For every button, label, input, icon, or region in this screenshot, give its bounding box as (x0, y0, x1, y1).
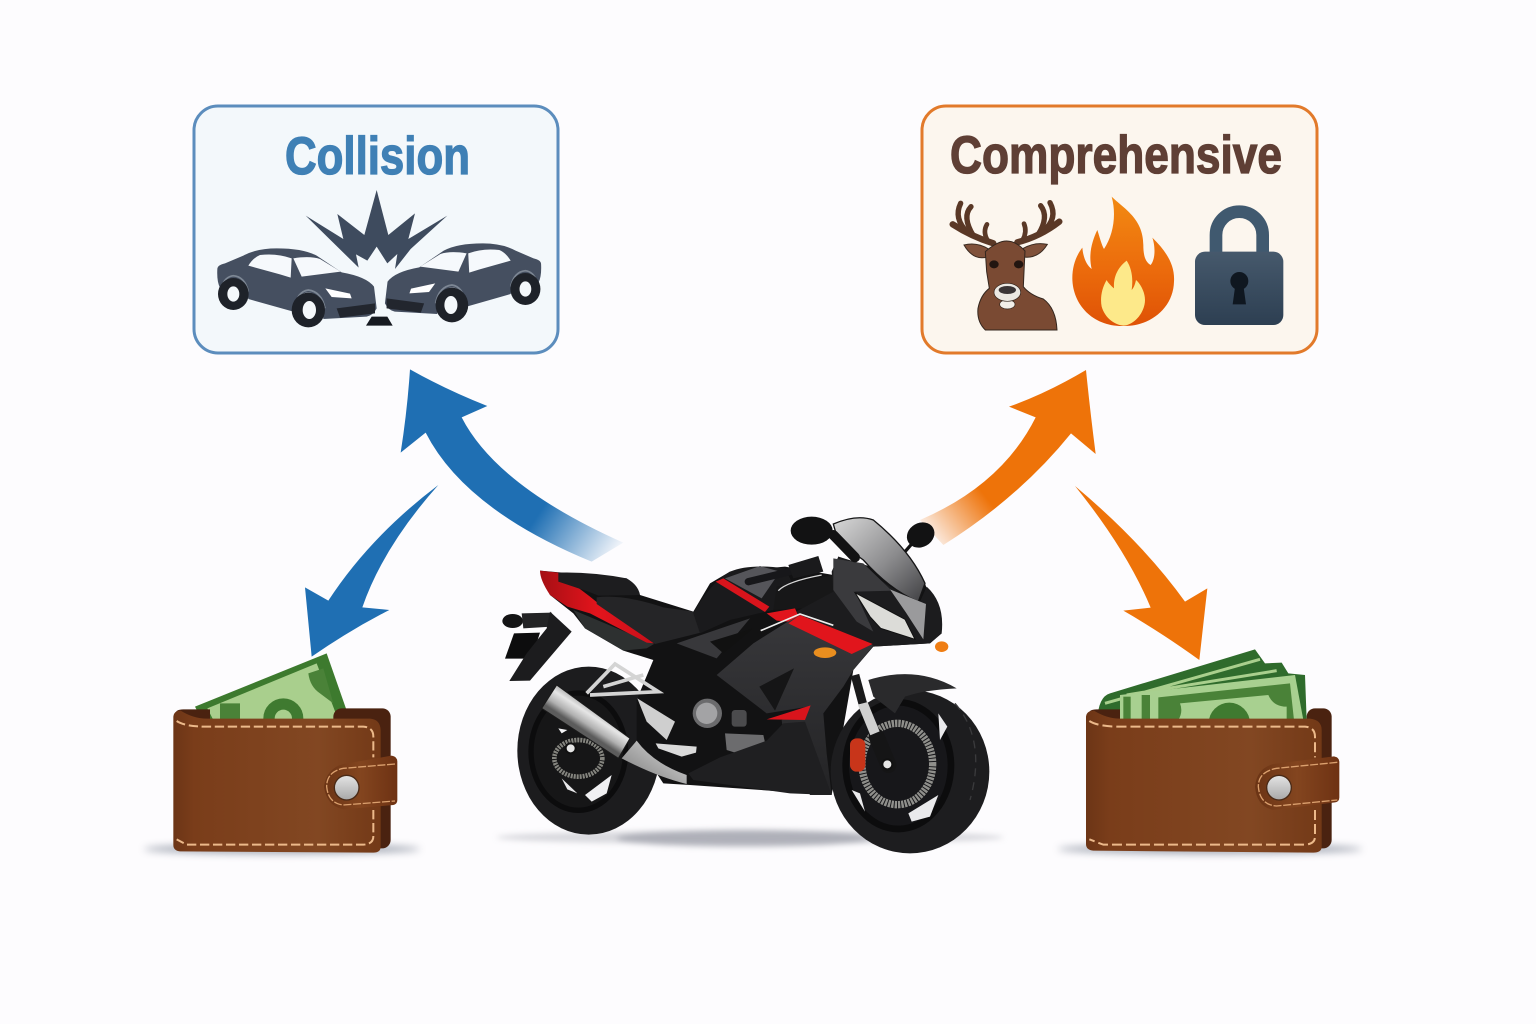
left car (217, 248, 377, 327)
pillion seat (558, 573, 640, 596)
clasp strap (324, 756, 397, 809)
arrow: blue collision to small wallet (305, 485, 438, 657)
front fender (868, 674, 957, 713)
arrow: orange comprehensive to large wallet (1075, 486, 1207, 660)
fuel tank (693, 566, 792, 633)
arrow: blue motorcycle to collision (401, 369, 623, 562)
tail section (540, 571, 654, 651)
icon: deer (953, 203, 1059, 330)
icon: fire (1072, 197, 1174, 326)
rear wheel (517, 667, 660, 835)
stitching (1089, 721, 1315, 845)
fairing vent (759, 668, 794, 711)
crash burst (306, 190, 447, 269)
wallet: small payout (144, 653, 420, 854)
stack of bills (1097, 649, 1307, 744)
turn signals (814, 641, 948, 658)
side fairing (717, 615, 873, 795)
single bill (195, 653, 350, 738)
subframe bracket (587, 664, 658, 695)
base silhouette (540, 557, 942, 795)
fork (877, 737, 888, 765)
snap button (334, 775, 359, 800)
icon: padlock (1195, 212, 1283, 325)
handlebar and controls (748, 556, 837, 610)
wallet shadow (144, 844, 420, 854)
ground shadow (497, 830, 1003, 847)
frame panel (677, 618, 750, 658)
right car (385, 243, 541, 322)
wallet front (1086, 711, 1322, 853)
wallet front (173, 711, 381, 853)
icons: deer, fire, lock (953, 197, 1283, 330)
comprehensive card frame (922, 106, 1317, 353)
nose fairing (790, 557, 942, 647)
wallet back (1307, 708, 1332, 848)
right mirror (902, 517, 939, 553)
panel: collision (194, 106, 558, 353)
front wheel (831, 675, 989, 853)
headlight cowl (855, 589, 926, 639)
wallet shadow (1058, 844, 1362, 854)
red fairing stripes (761, 608, 873, 720)
wallet back (333, 708, 391, 848)
motorcycle (497, 517, 1003, 853)
exhaust (542, 685, 687, 784)
heading: Collision: Collision (285, 127, 470, 186)
clasp strap (1255, 756, 1339, 810)
arrow: orange motorcycle to comprehensive (920, 370, 1096, 545)
rider seat (597, 597, 701, 644)
icon: two cars crashing (217, 190, 541, 327)
left mirror (791, 517, 855, 557)
brake caliper (850, 738, 865, 772)
wallet: large payout (1058, 649, 1362, 854)
collision card frame (194, 106, 558, 353)
engine cover (693, 699, 767, 758)
panel: comprehensive (922, 106, 1317, 353)
snap button (1267, 775, 1291, 800)
upper cowl panel (833, 558, 892, 632)
windscreen (833, 518, 925, 602)
footpeg plate (637, 698, 675, 740)
belly pan (688, 722, 832, 795)
rear fender and plate (502, 612, 572, 681)
heading: Comprehensive: Comprehensive (950, 126, 1282, 185)
stitching (177, 721, 373, 845)
debris wedge (366, 317, 393, 326)
